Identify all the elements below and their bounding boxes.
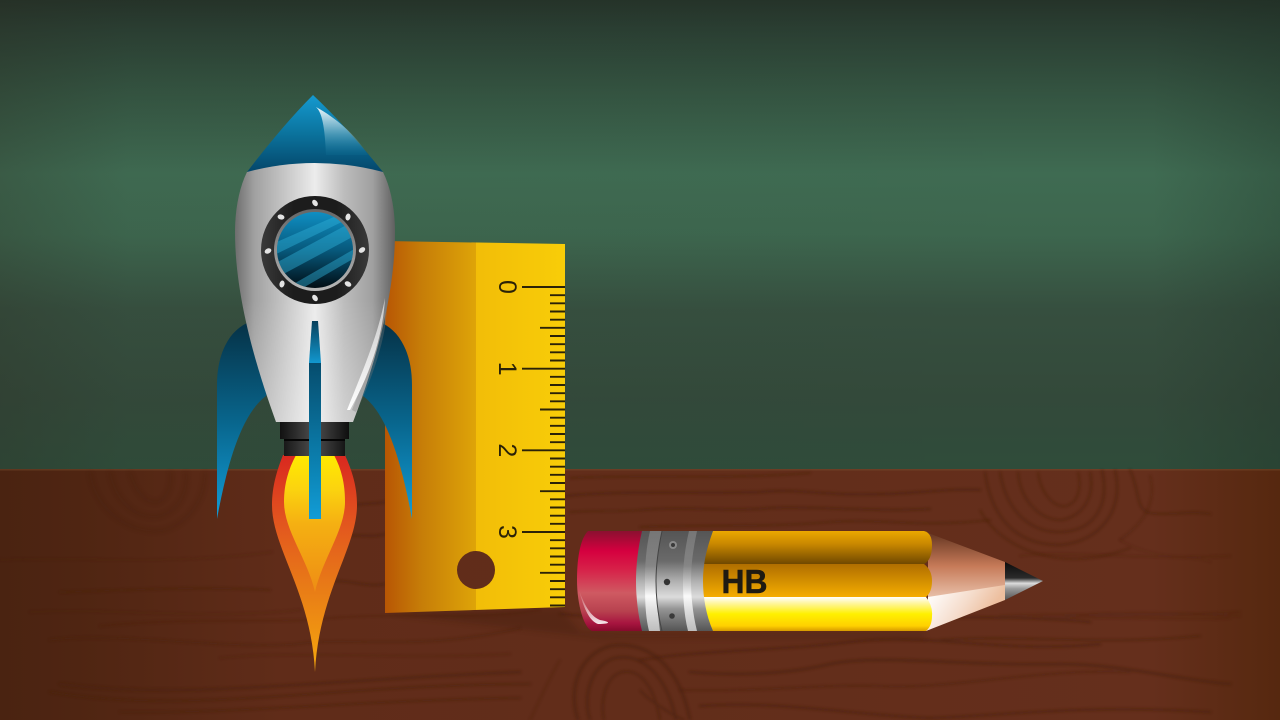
ruler numbers: 3 [493, 525, 521, 539]
rocket flame [272, 455, 357, 672]
pencil [577, 531, 1043, 631]
rocket hull [235, 163, 395, 422]
ruler numbers: 0 [493, 280, 521, 294]
pencil eraser [577, 531, 645, 631]
rocket engine nozzle [280, 422, 349, 456]
rocket nose cone [247, 95, 383, 172]
wooden table [0, 469, 1280, 720]
pencil metal ferrule [636, 531, 713, 631]
ruler numbers [493, 280, 521, 539]
pencil lead [1005, 562, 1043, 600]
rocket porthole [261, 196, 369, 304]
background wall [0, 0, 1280, 470]
rocket center fin [309, 321, 321, 519]
wood knots [530, 470, 1152, 720]
ruler numbers: 1 [493, 362, 521, 376]
rocket side fins [217, 323, 412, 519]
pencil HB label: HB [722, 563, 768, 600]
ruler tick marks [522, 287, 565, 606]
ruler [385, 241, 565, 613]
ruler numbers: 2 [493, 443, 521, 457]
pencil body stripes [700, 531, 932, 631]
pencil wood tip [926, 533, 1005, 631]
rocket [217, 95, 412, 672]
ruler body with hole [385, 241, 565, 613]
